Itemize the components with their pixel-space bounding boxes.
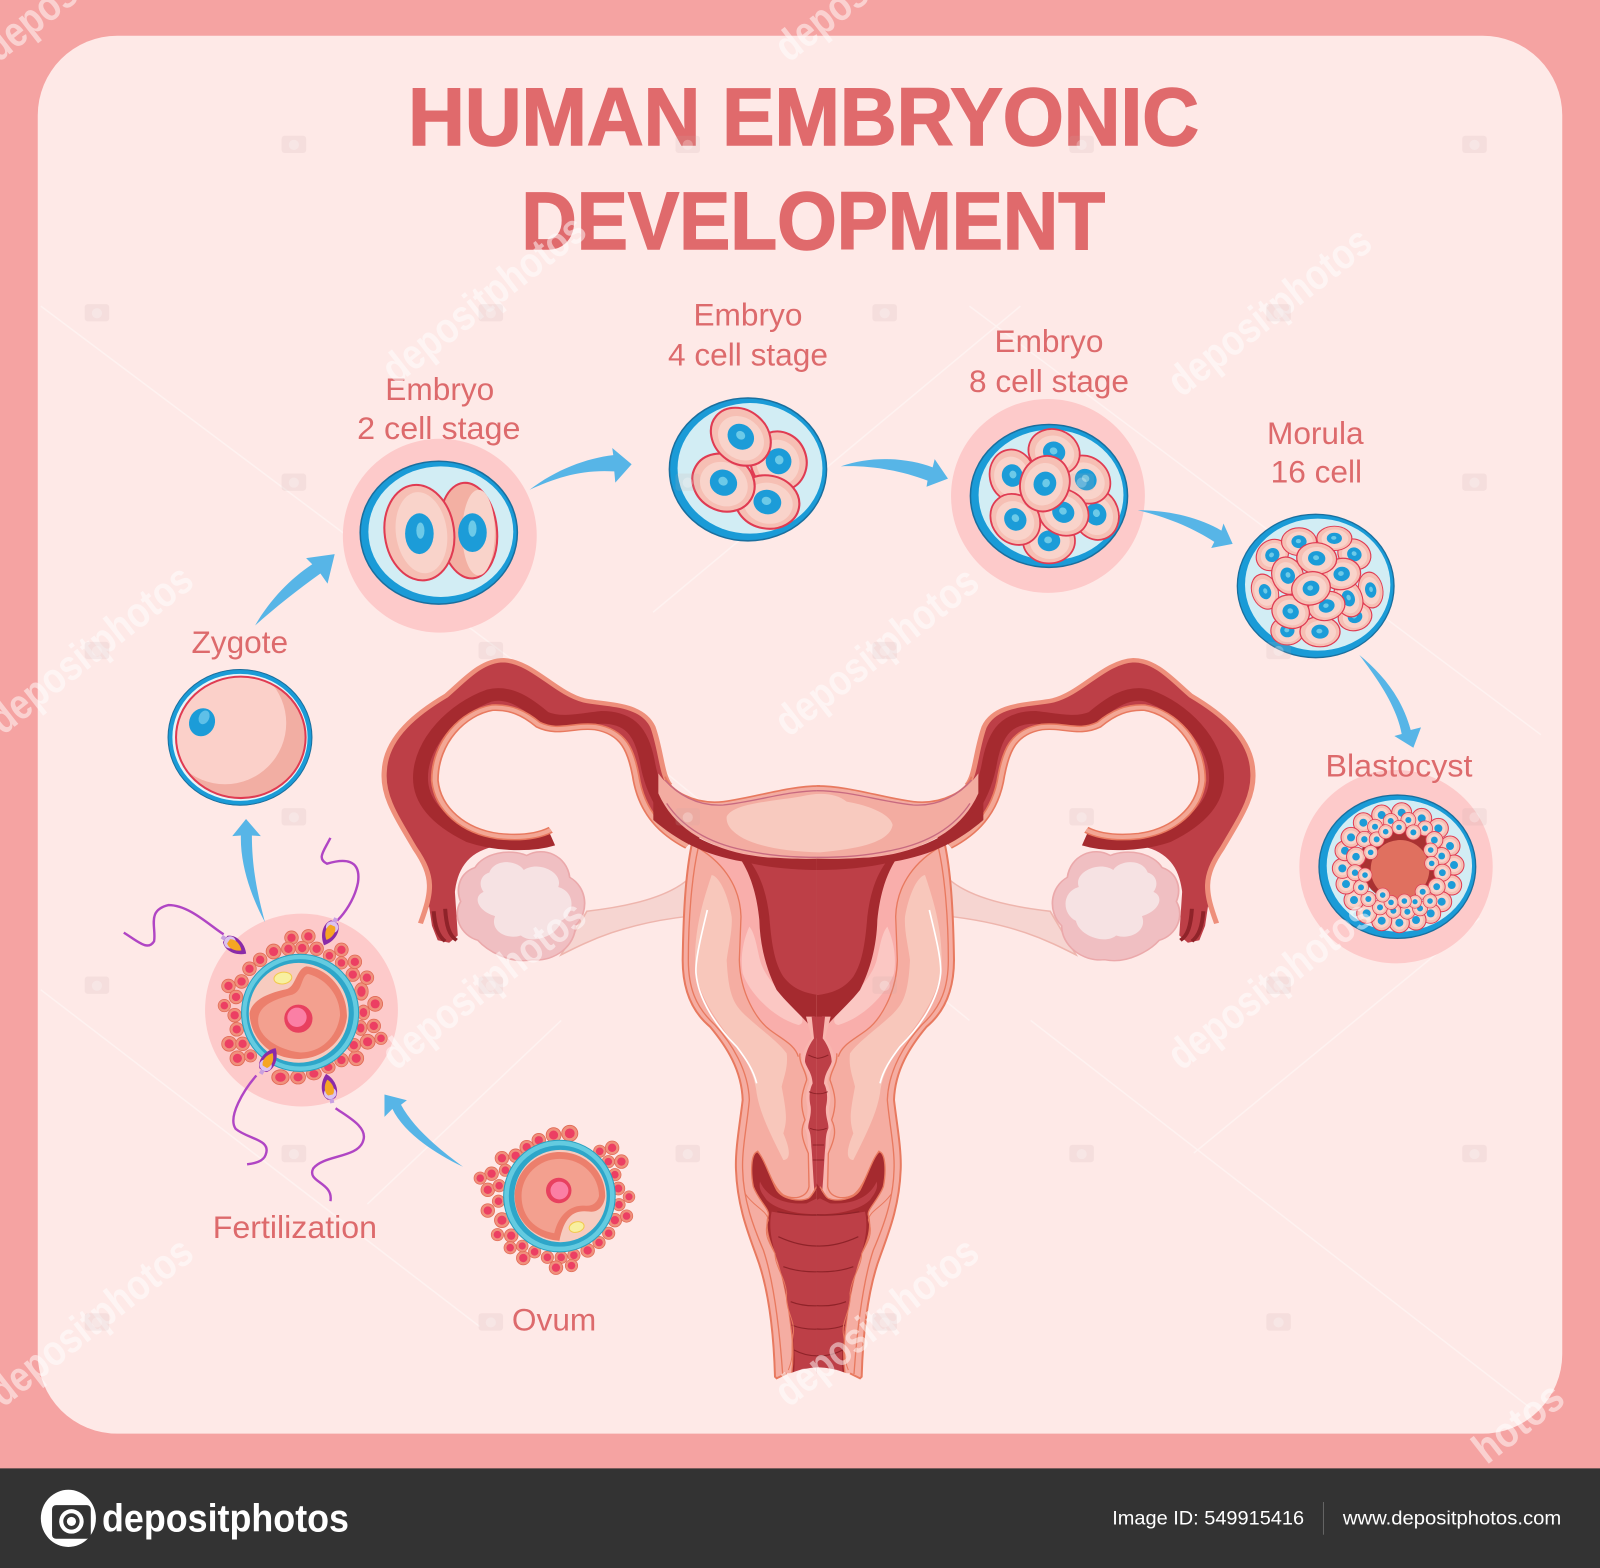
watermark overlay: depositphotos xyxy=(1158,217,1381,406)
label: embryo 2 cell stage: 2 cell stage xyxy=(357,410,520,446)
label: embryo 8 cell stage: 8 cell stage xyxy=(969,363,1129,399)
arrow: 4 cell to 8 cell xyxy=(841,459,948,487)
label: embryo 2 cell stage: Embryo xyxy=(385,371,494,407)
uterus anatomy diagram xyxy=(384,660,1253,1381)
label: zygote: Zygote xyxy=(191,624,288,660)
label: embryo 8 cell stage: Embryo xyxy=(994,323,1103,359)
label: embryo 4 cell stage xyxy=(668,297,828,372)
title: HUMAN EMBRYONIC xyxy=(408,72,1199,163)
arrow: 8 cell to morula xyxy=(1138,510,1233,548)
stage: blastocyst xyxy=(1299,770,1493,963)
stage: ovum xyxy=(474,1125,635,1274)
stage: fertilization with sperm xyxy=(124,838,398,1201)
label: embryo 4 cell stage: Embryo xyxy=(693,297,802,333)
arrow: 2 cell to 4 cell xyxy=(530,448,632,490)
arrow: ovum to fertilization xyxy=(384,1094,463,1167)
label: embryo 8 cell stage xyxy=(969,323,1129,399)
label: embryo 4 cell stage: 4 cell stage xyxy=(668,336,828,372)
stage: embryo 4 cell xyxy=(669,396,827,541)
watermark overlay: hotos xyxy=(1463,1373,1573,1473)
label: morula 16 cell: Morula xyxy=(1267,415,1364,451)
footer website: www.depositphotos.com xyxy=(1342,1507,1561,1529)
arrow: zygote to 2 cell xyxy=(255,554,335,626)
watermark overlay: depositphotos xyxy=(1158,891,1381,1079)
arrow: morula to blastocyst xyxy=(1359,655,1421,748)
stage: embryo 2 cell xyxy=(343,439,537,633)
fallopian tubes and ovaries xyxy=(384,660,1253,961)
stage: morula 16 cell xyxy=(1237,514,1394,658)
title: DEVELOPMENT xyxy=(521,176,1105,267)
watermark overlay: depositphotos xyxy=(373,205,595,394)
arrow: fertilization to zygote xyxy=(232,819,265,922)
icon: depositphotos camera logo xyxy=(41,1490,96,1547)
footer logo wordmark: depositphotos xyxy=(102,1498,349,1541)
label: fertilization: Fertilization xyxy=(213,1209,377,1245)
label: blastocyst: Blastocyst xyxy=(1326,748,1473,784)
watermark overlay: depositphotos xyxy=(765,1227,988,1416)
watermark overlay: depositphotos xyxy=(373,891,595,1079)
title xyxy=(408,72,1199,267)
uterus body, cervix and vagina xyxy=(653,773,983,1381)
stage: zygote xyxy=(164,662,312,805)
footer image id: Image ID: 549915416 xyxy=(1112,1507,1304,1529)
label: morula 16 cell: 16 cell xyxy=(1271,454,1362,490)
footer bar xyxy=(0,1468,1600,1568)
label: ovum: Ovum xyxy=(512,1302,596,1338)
watermark overlay: depositphotos xyxy=(765,557,988,746)
label: morula 16 cell xyxy=(1267,415,1364,490)
label: embryo 2 cell stage xyxy=(357,371,520,446)
stage: embryo 8 cell xyxy=(951,399,1145,593)
